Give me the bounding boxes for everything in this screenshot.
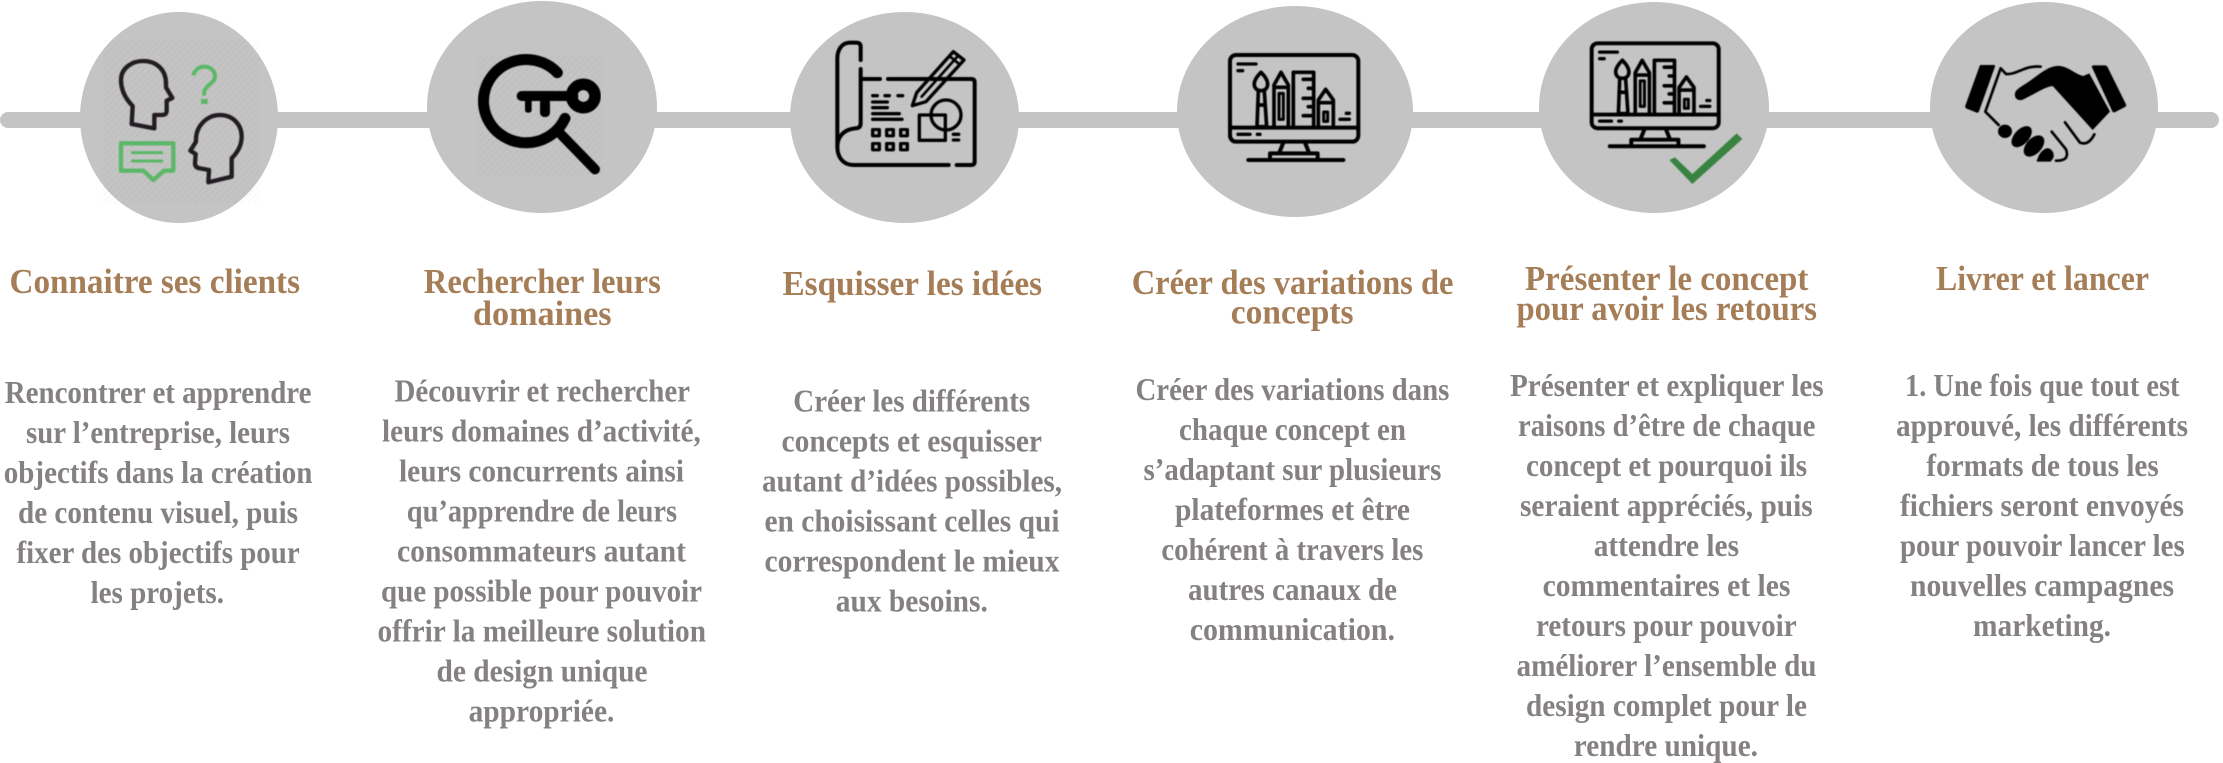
body text 1: les projets. xyxy=(91,574,224,610)
icon: two heads with question and speech bubble xyxy=(103,40,260,203)
body text 1: sur l’entreprise, leurs xyxy=(26,414,290,450)
body text 6: formats de tous les xyxy=(1926,447,2159,483)
node circle 1 xyxy=(80,12,278,223)
heading 5: pour avoir les retours xyxy=(1516,289,1817,328)
node circle 6 xyxy=(1930,2,2158,213)
body text 1: Rencontrer et apprendre xyxy=(5,374,311,410)
step 1: connaitre ses clients xyxy=(4,12,313,610)
node circle 5 xyxy=(1539,2,1769,213)
body text 3: aux besoins. xyxy=(836,582,988,618)
body text 3 xyxy=(762,382,1062,618)
body text 1: fixer des objectifs pour xyxy=(16,534,300,570)
body text 5: Présenter et expliquer les xyxy=(1510,367,1824,403)
heading 4 xyxy=(1132,263,1454,332)
body text 1: objectifs dans la création xyxy=(4,454,313,490)
heading 2: domaines xyxy=(473,294,612,333)
body text 5: seraient appréciés, puis xyxy=(1520,487,1813,523)
step 5: presenter le concept xyxy=(1510,2,1824,763)
node circle 4 xyxy=(1177,6,1413,217)
body text 4: communication. xyxy=(1190,611,1395,647)
body text 2: qu’apprendre de leurs xyxy=(407,492,677,528)
body text 3: concepts et esquisser xyxy=(782,422,1042,458)
timeline bar xyxy=(0,112,2219,128)
body text 4: plateformes et être xyxy=(1175,491,1410,527)
heading 3: Esquisser les idées xyxy=(782,264,1042,303)
body text 4: s’adaptant sur plusieurs xyxy=(1144,451,1441,487)
body text 1 xyxy=(4,374,313,610)
body text 5: améliorer l’ensemble du xyxy=(1516,647,1816,683)
body text 5: design complet pour le xyxy=(1526,687,1807,723)
body text 5 xyxy=(1510,367,1824,763)
body text 5: attendre les xyxy=(1594,527,1739,563)
body text 6: nouvelles campagnes xyxy=(1910,567,2174,603)
icon: monitor with check mark xyxy=(1592,43,1742,184)
body text 5: rendre unique. xyxy=(1574,727,1758,763)
step 4: creer des variations xyxy=(1132,6,1454,647)
body text 2: leurs concurrents ainsi xyxy=(399,452,684,488)
heading 4: concepts xyxy=(1231,292,1354,332)
icon: magnifier with key xyxy=(477,55,603,175)
body text 5: concept et pourquoi ils xyxy=(1526,447,1807,483)
body text 3: en choisissant celles qui xyxy=(764,502,1060,538)
body text 6 xyxy=(1896,367,2188,643)
body text 6: marketing. xyxy=(1973,607,2111,643)
body text 6: fichiers seront envoyés xyxy=(1900,487,2184,523)
heading 1: Connaitre ses clients xyxy=(10,262,300,301)
body text 5: retours pour pouvoir xyxy=(1536,607,1797,643)
body text 2: appropriée. xyxy=(469,692,614,728)
heading 6: Livrer et lancer xyxy=(1936,259,2149,298)
heading 5 xyxy=(1516,259,1817,328)
step 6: livrer et lancer xyxy=(1896,2,2188,643)
body text 2: Découvrir et rechercher xyxy=(394,372,690,408)
heading 2: Rechercher leurs xyxy=(424,262,661,301)
body text 6: pour pouvoir lancer les xyxy=(1900,527,2185,563)
step 3: esquisser les idees xyxy=(762,12,1062,618)
body text 3: Créer les différents xyxy=(793,382,1030,418)
body text 2: consommateurs autant xyxy=(397,532,686,568)
node circle 2 xyxy=(427,1,657,213)
heading 2 xyxy=(424,262,661,333)
body text 2: que possible pour pouvoir xyxy=(381,572,702,608)
body text 3: correspondent le mieux xyxy=(764,542,1060,578)
body text 4 xyxy=(1136,371,1449,647)
body text 4: cohérent à travers les xyxy=(1161,531,1423,567)
body text 6: 1. Une fois que tout est xyxy=(1905,367,2180,403)
icon: handshake xyxy=(1965,65,2126,162)
body text 5: raisons d’être de chaque xyxy=(1518,407,1816,443)
body text 4: Créer des variations dans xyxy=(1136,371,1449,407)
body text 5: commentaires et les xyxy=(1543,567,1790,603)
icon: monitor with design tools xyxy=(1230,55,1358,160)
heading 4: Créer des variations de xyxy=(1132,263,1454,302)
step 2: rechercher leurs domaines xyxy=(378,1,706,728)
body text 4: autres canaux de xyxy=(1188,571,1397,607)
body text 4: chaque concept en xyxy=(1179,411,1406,447)
body text 2: de design unique xyxy=(436,652,648,688)
icon: blueprint with pencil xyxy=(837,43,975,165)
body text 6: approuvé, les différents xyxy=(1896,407,2188,443)
body text 2: offrir la meilleure solution xyxy=(378,612,706,648)
node circle 3 xyxy=(790,12,1019,223)
body text 3: autant d’idées possibles, xyxy=(762,462,1062,498)
body text 1: de contenu visuel, puis xyxy=(18,494,298,530)
heading 5: Présenter le concept xyxy=(1525,259,1809,298)
body text 2: leurs domaines d’activité, xyxy=(382,412,701,448)
body text 2 xyxy=(378,372,706,728)
